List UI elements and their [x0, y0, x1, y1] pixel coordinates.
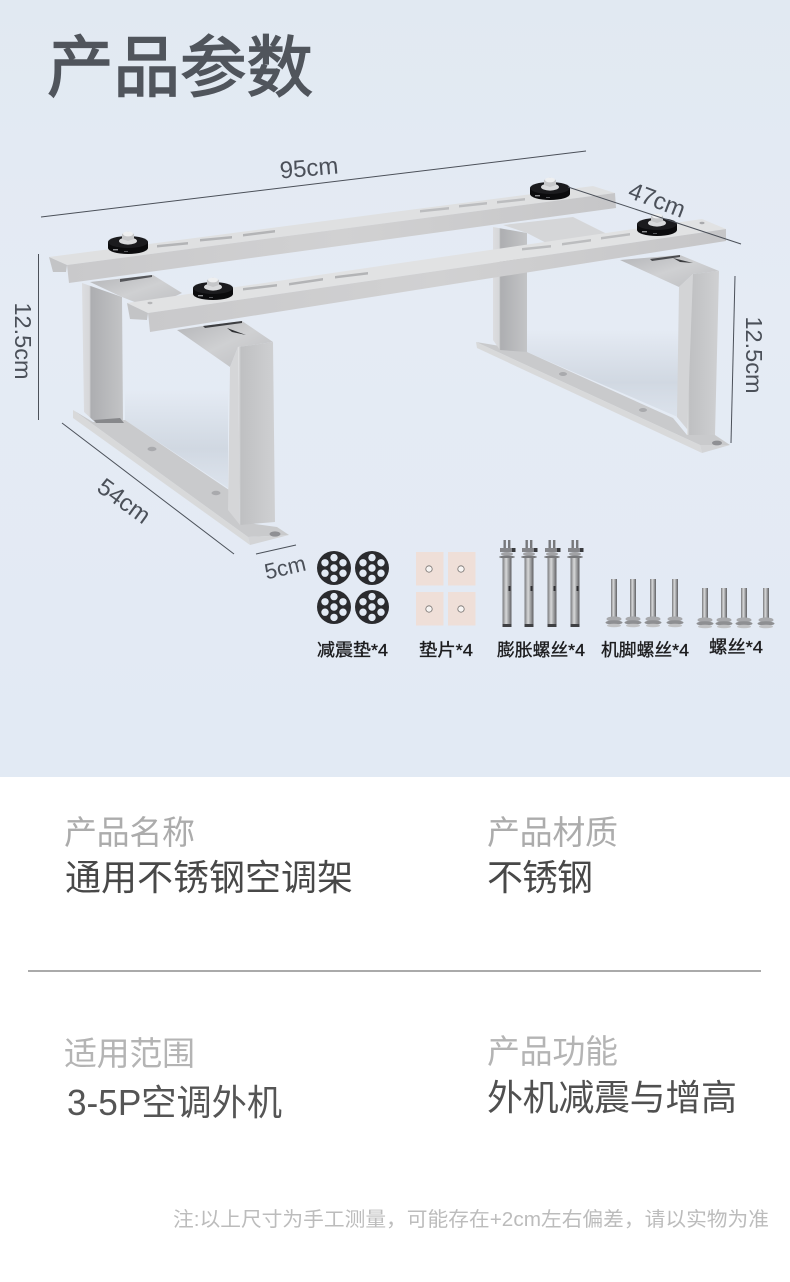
spec: function: 外机减震与增高 [487, 1077, 737, 1118]
floor shadow: left [125, 390, 228, 488]
dimension: right 12.5cm [731, 276, 767, 443]
spec: function: 产品功能 [487, 1033, 618, 1070]
dimension: left 12.5cm: 12.5cm [10, 302, 36, 380]
dimension: 54cm: 54cm [92, 473, 155, 530]
accessory: expansion screws: 膨胀螺丝*4 [497, 640, 585, 660]
spec: scope of use: 适用范围 [64, 1035, 195, 1072]
spec: product name: 产品名称 [64, 814, 195, 851]
title: 产品参数 [47, 31, 313, 106]
back rail [49, 178, 616, 283]
dimension: 54cm [62, 423, 234, 554]
accessory: foot bolts: 机脚螺丝*4 [601, 640, 689, 660]
divider [28, 970, 761, 972]
spec: scope of use: 3-5P空调外机 [67, 1082, 282, 1123]
vibration mount [108, 232, 148, 254]
accessory: screws: 螺丝*4 [709, 637, 763, 657]
accessory: foot bolts [601, 579, 689, 660]
spec: material: 产品材质 [487, 814, 618, 851]
vibration mount [530, 178, 570, 200]
spec: material [487, 814, 618, 898]
dimension: 47cm: 47cm [625, 177, 689, 224]
spec: scope of use [64, 1035, 282, 1123]
vibration mount [193, 278, 233, 300]
accessory: expansion screws [497, 540, 585, 660]
footnote: 注:以上尺寸为手工测量，可能存在+2cm左右偏差，请以实物为准 [173, 1208, 769, 1231]
accessory: gaskets [416, 552, 476, 660]
spec: material: 不锈钢 [487, 857, 593, 898]
spec: product name: 通用不锈钢空调架 [65, 857, 353, 898]
accessory: gaskets: 垫片*4 [419, 640, 473, 660]
illustration: air-conditioner bracket [49, 178, 730, 545]
dimension: 95cm [41, 151, 586, 217]
accessory: vibration pads [317, 551, 389, 660]
accessory: screws [696, 588, 774, 657]
dimension: 5cm: 5cm [262, 551, 308, 584]
spec: function [487, 1033, 737, 1118]
accessory: vibration pads: 减震垫*4 [317, 640, 388, 660]
left frame [73, 275, 289, 545]
dimension: right 12.5cm: 12.5cm [741, 316, 767, 394]
floor shadow: right [527, 330, 680, 418]
vibration mount [637, 214, 677, 236]
panel: product photo background [0, 0, 790, 777]
right frame [476, 217, 730, 453]
dimension: 47cm [568, 177, 741, 244]
spec: product name [64, 814, 353, 898]
front rail [127, 214, 726, 332]
dimension: 95cm: 95cm [279, 152, 339, 185]
